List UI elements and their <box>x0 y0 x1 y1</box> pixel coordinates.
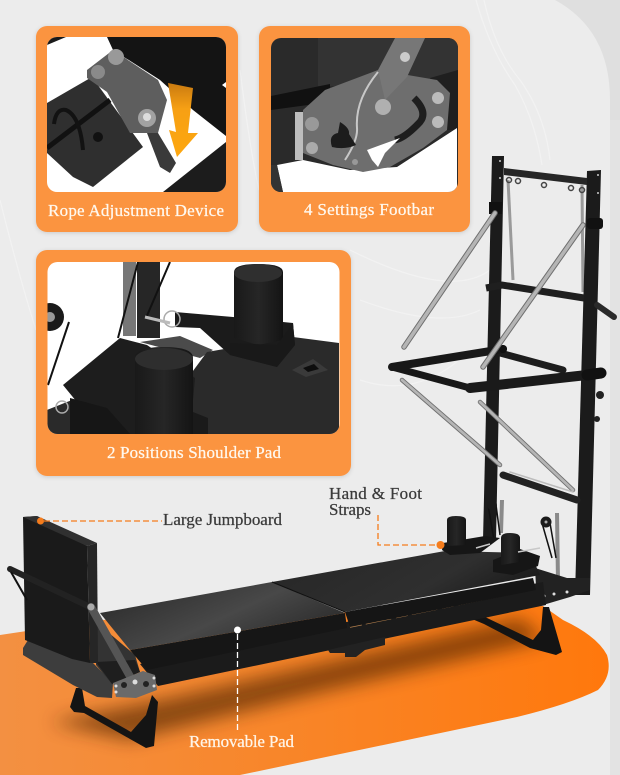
footbar plate <box>113 671 157 698</box>
strip under carriage <box>350 592 520 627</box>
rear vertical springs <box>508 180 583 292</box>
photo: rope adjustment close-up <box>47 37 226 192</box>
label: 2 positions shoulder pad: 2 Positions Shoulder Pad <box>107 443 282 462</box>
rear pulleys <box>487 500 558 582</box>
rail beam <box>140 582 546 686</box>
icon: orange arrow <box>168 83 198 157</box>
callout: removable pad: Removable Pad <box>189 732 294 751</box>
label: 4 settings footbar: 4 Settings Footbar <box>304 200 434 219</box>
jumpboard <box>23 516 98 663</box>
panel: 2 positions shoulder pad <box>36 250 351 476</box>
right folding leg <box>472 607 562 655</box>
callout: large jumpboard <box>37 510 282 529</box>
reformer bench <box>10 516 590 748</box>
photo: footbar plate close-up <box>271 38 458 192</box>
jumpboard base <box>23 640 113 698</box>
callout: hand and foot straps: Straps <box>329 500 371 519</box>
front shoulder pad <box>493 533 540 575</box>
callout: hand and foot straps <box>329 484 444 549</box>
carriage end <box>96 622 140 684</box>
silver spring rods <box>402 213 583 500</box>
removable pad shape <box>130 613 347 670</box>
panel: 4 settings footbar <box>259 26 470 232</box>
tower frame <box>392 156 614 595</box>
panel: rope adjustment device <box>36 26 238 232</box>
callout: hand and foot straps: Hand & Foot <box>329 484 422 503</box>
frame uprights and crossbars <box>483 156 614 595</box>
rail brackets <box>328 637 385 657</box>
rear shoulder pad <box>442 516 500 555</box>
jumpboard handle bar <box>10 569 90 607</box>
callout: removable pad <box>189 626 294 751</box>
footbar arm <box>91 607 132 680</box>
label: rope adjustment device: Rope Adjustment Device <box>48 201 224 220</box>
second pad shape <box>345 578 536 627</box>
horizontal arm bars <box>392 345 604 422</box>
left folding leg <box>70 688 158 748</box>
callout: large jumpboard: Large Jumpboard <box>163 510 282 529</box>
frame base <box>535 568 590 605</box>
photo: shoulder pads close-up <box>36 262 340 434</box>
orange floor <box>0 606 609 775</box>
